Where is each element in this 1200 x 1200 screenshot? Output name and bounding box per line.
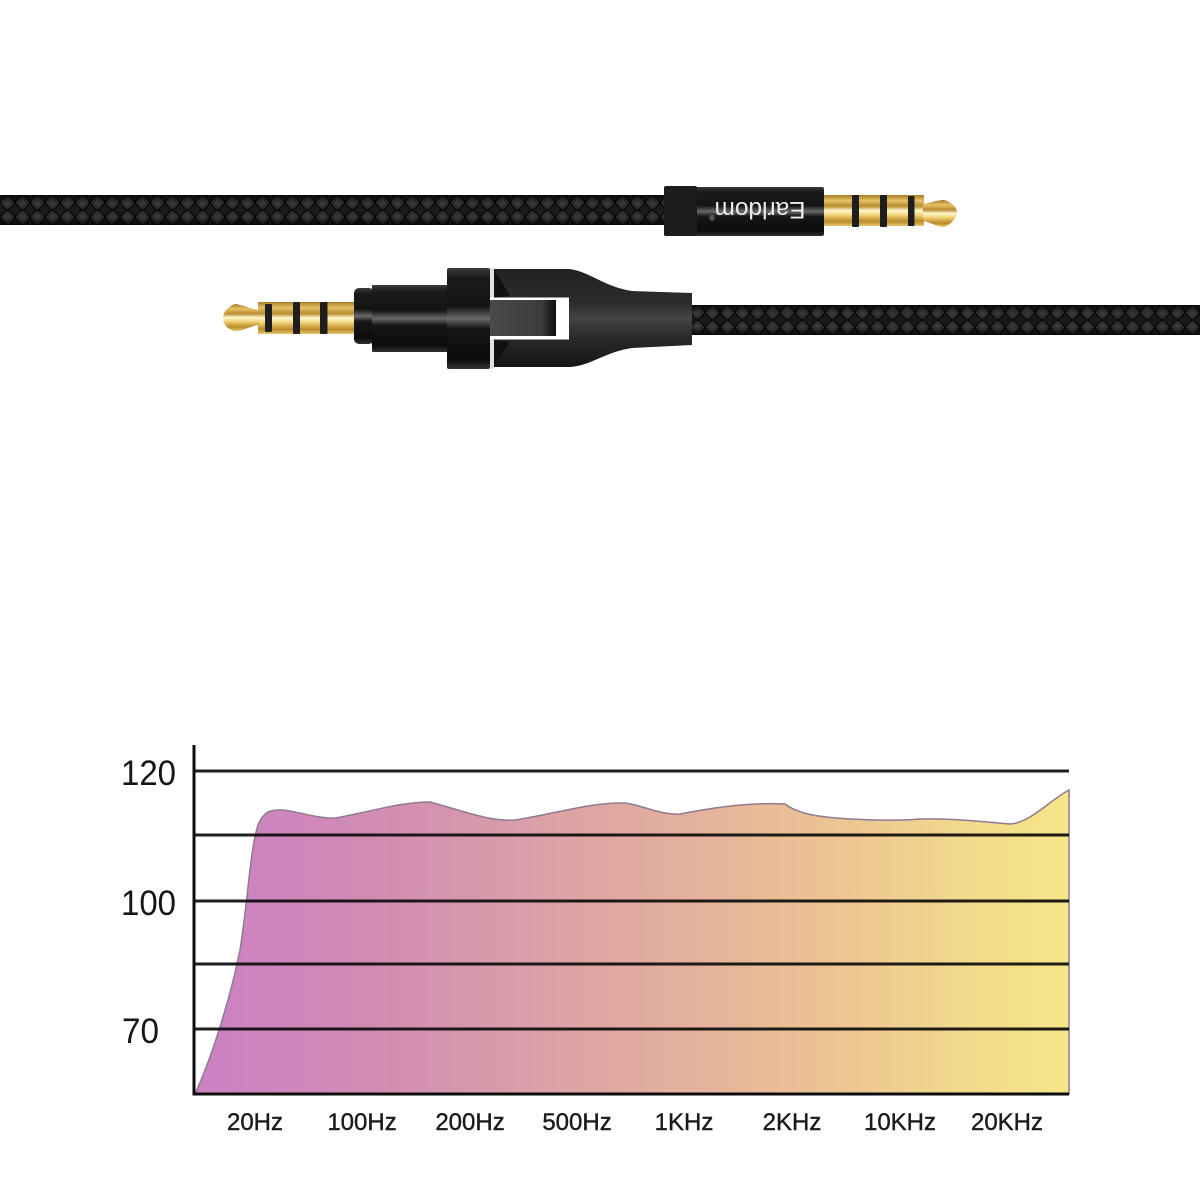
gradient area curve (195, 790, 1069, 1094)
x-axis labels: 100Hz (327, 1109, 397, 1136)
sliding slot (490, 298, 569, 340)
x-axis labels (227, 1109, 1043, 1136)
y-axis labels: 120 (121, 754, 176, 793)
x-axis labels: 2KHz (763, 1109, 821, 1136)
x-axis labels: 20Hz (227, 1109, 283, 1136)
gold 4-pole plug: top (824, 195, 957, 227)
frequency response chart (121, 745, 1069, 1136)
adapter body (490, 268, 692, 369)
gold 4-pole plug: bottom (223, 302, 356, 334)
y-axis labels: 100 (121, 884, 176, 923)
x-axis labels: 20KHz (971, 1109, 1043, 1136)
x-axis labels: 500Hz (542, 1109, 612, 1136)
x-axis labels: 10KHz (864, 1109, 936, 1136)
brand name: Earldom (714, 196, 806, 223)
braided cable: top (0, 195, 666, 225)
metal ferrule with brand (664, 186, 824, 236)
registered mark: ® (709, 213, 715, 221)
x-axis labels: 200Hz (435, 1109, 505, 1136)
braided cable: bottom (690, 305, 1200, 335)
y-axis labels (121, 754, 176, 1051)
axes (194, 745, 1069, 1094)
x-axis labels: 1KHz (655, 1109, 713, 1136)
top audio cable (0, 186, 957, 236)
y-axis labels: 70 (122, 1012, 159, 1051)
black barrel (354, 285, 448, 352)
grid lines (194, 771, 1069, 1029)
bottom audio cable with adapter (223, 268, 1200, 369)
locking collar (447, 268, 490, 369)
